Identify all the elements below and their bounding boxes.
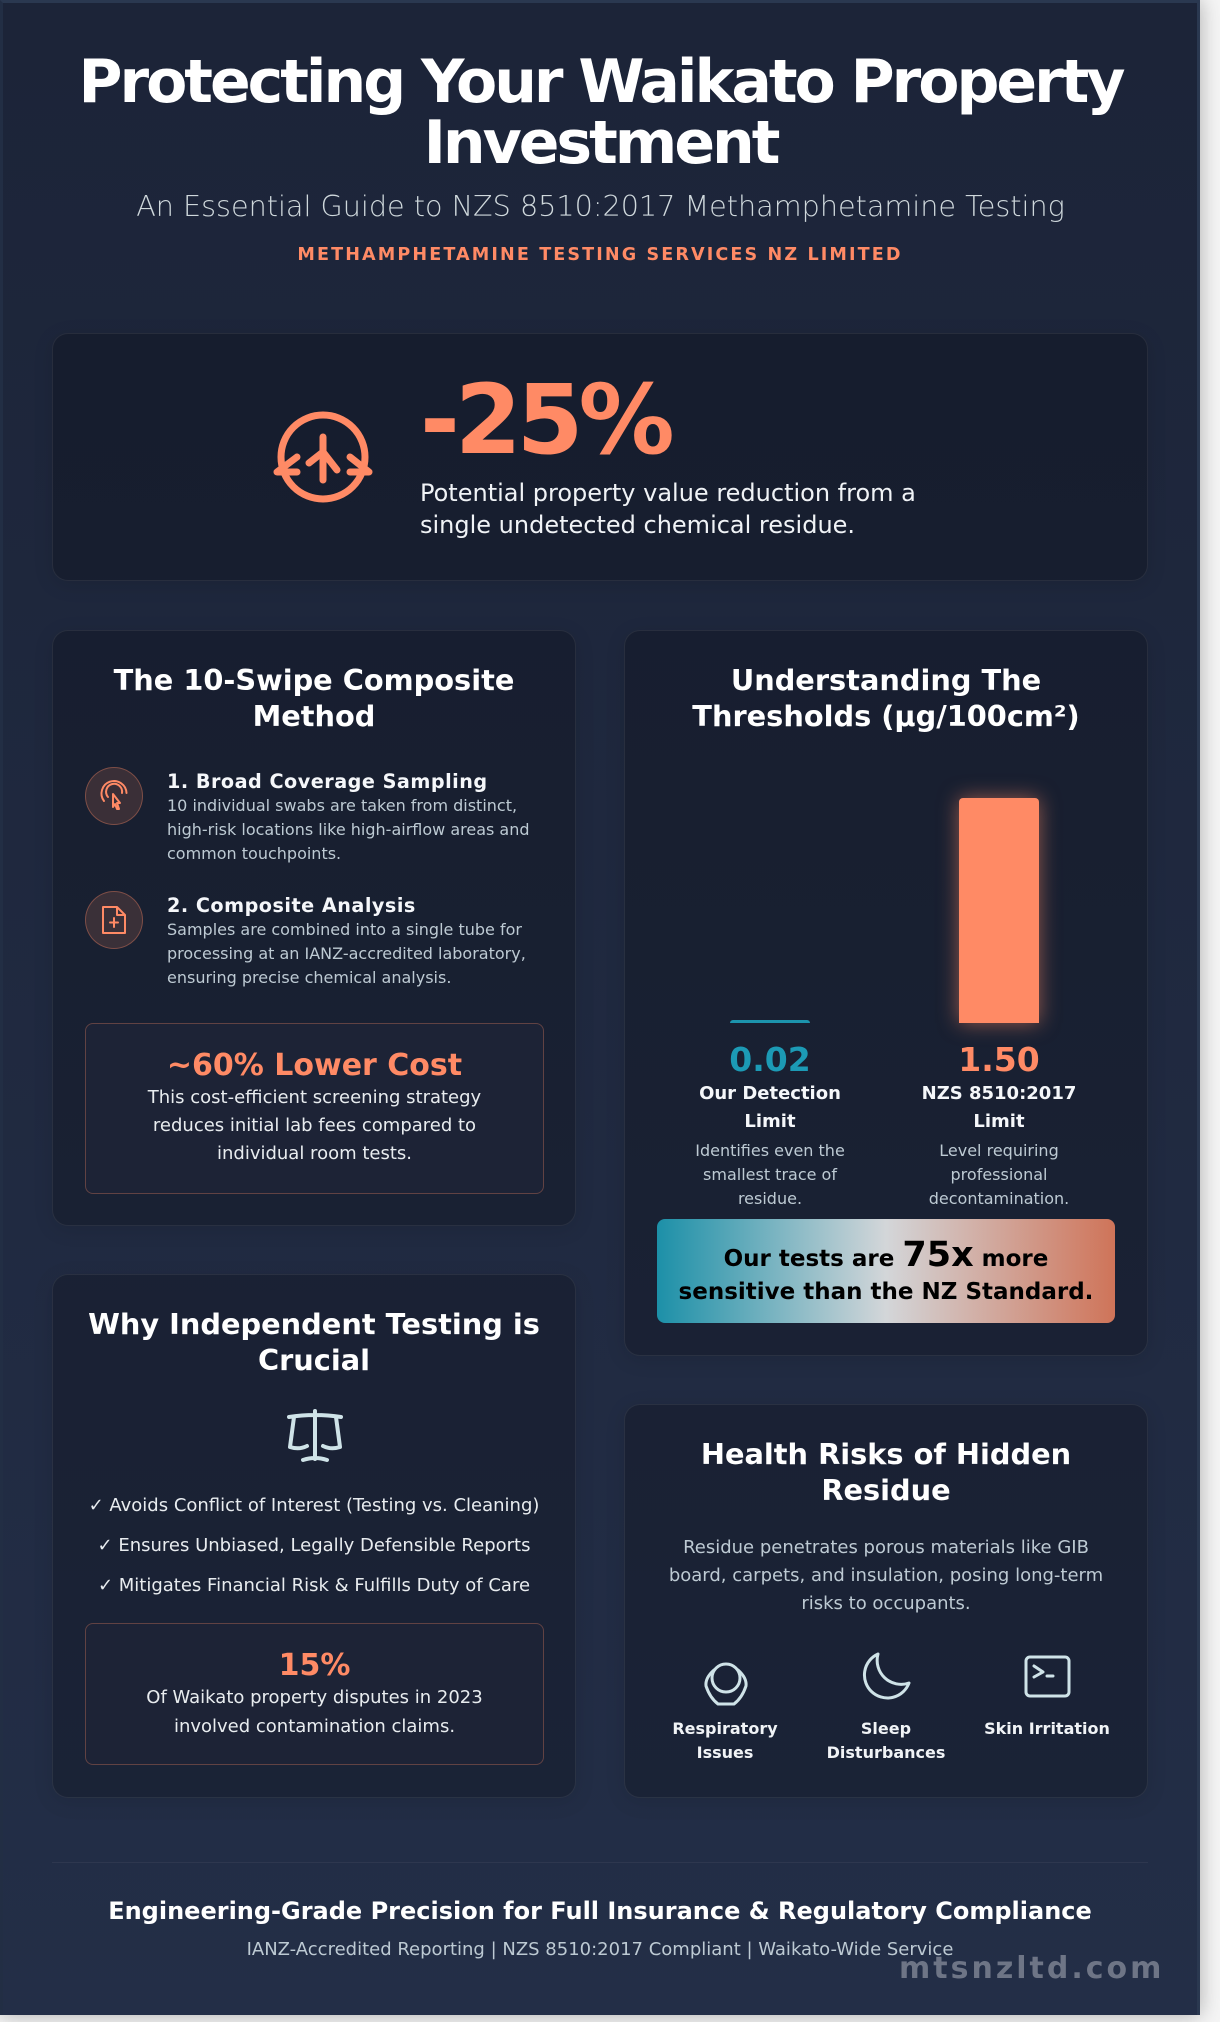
step 1 text: 10 individual swabs are taken from distinct, xyxy=(167,796,517,815)
stat description: single undetected chemical residue. xyxy=(420,511,855,539)
title xyxy=(78,47,1124,178)
header xyxy=(78,47,1124,265)
risk: respiratory xyxy=(672,1662,778,1762)
label: standard limit xyxy=(922,1083,1076,1132)
panel: value reduction hero xyxy=(52,333,1148,581)
subtitle: An Essential Guide to NZS 8510:2017 Methamphetamine Testing xyxy=(136,189,1065,223)
footer xyxy=(52,1862,1148,1963)
bar chart xyxy=(695,784,1076,1208)
label: detection limit xyxy=(699,1083,841,1132)
label: standard limit: Limit xyxy=(973,1111,1025,1132)
icon: moon xyxy=(862,1652,910,1700)
value: 0.02: 0.02 xyxy=(729,1040,811,1079)
note: standard limit: professional xyxy=(951,1165,1047,1184)
step 2 text: ensuring precise chemical analysis. xyxy=(167,968,451,987)
checklist: ✓ Mitigates Financial Risk & Fulfills Duty of Care xyxy=(98,1575,530,1596)
big stat: -25% xyxy=(420,364,670,476)
label: Disturbances xyxy=(827,1743,945,1762)
step 2 title: 2. Composite Analysis xyxy=(167,894,416,917)
checklist xyxy=(89,1495,539,1596)
label: Respiratory xyxy=(672,1719,778,1738)
callout figure: ~60% Lower Cost xyxy=(167,1048,462,1083)
panel: 10-swipe composite method xyxy=(52,630,576,1226)
checklist: ✓ Ensures Unbiased, Legally Defensible Reports xyxy=(98,1535,530,1556)
heading: Method xyxy=(253,699,375,733)
note: detection limit: smallest trace of xyxy=(703,1165,837,1184)
label xyxy=(672,1719,778,1762)
value: 1.50: 1.50 xyxy=(958,1040,1040,1079)
footer headline: Engineering-Grade Precision for Full Insurance & Regulatory Compliance xyxy=(108,1897,1092,1925)
bar: detection limit xyxy=(730,1020,810,1023)
intro text: Residue penetrates porous materials like GIB xyxy=(683,1537,1089,1558)
callout text xyxy=(148,1087,481,1164)
step 2 text: Samples are combined into a single tube for xyxy=(167,920,522,939)
intro text: risks to occupants. xyxy=(801,1593,971,1614)
note: standard limit: decontamination. xyxy=(929,1189,1069,1208)
note: standard limit xyxy=(929,1141,1069,1208)
label: Sleep xyxy=(861,1719,911,1738)
icon: terminal xyxy=(1024,1656,1070,1698)
panel: understanding the thresholds xyxy=(624,630,1148,1356)
heading: Why Independent Testing is xyxy=(88,1307,540,1341)
note: detection limit: residue. xyxy=(738,1189,802,1208)
step 2 text xyxy=(167,920,526,987)
callout text: involved contamination claims. xyxy=(174,1716,455,1737)
label: Skin Irritation xyxy=(984,1719,1110,1738)
callout text: reduces initial lab fees compared to xyxy=(153,1115,476,1136)
label xyxy=(827,1719,945,1762)
heading: Crucial xyxy=(258,1343,370,1377)
intro text: board, carpets, and insulation, posing long-term xyxy=(669,1565,1103,1586)
callout text: Of Waikato property disputes in 2023 xyxy=(146,1687,483,1708)
heading xyxy=(114,663,514,733)
label: detection limit: Our Detection xyxy=(699,1083,841,1104)
label: Issues xyxy=(697,1743,753,1762)
risk: skin xyxy=(984,1656,1110,1738)
callout text xyxy=(146,1687,483,1737)
title: Investment xyxy=(424,108,777,178)
step 2 xyxy=(85,891,526,987)
heading: Thresholds (µg/100cm²) xyxy=(692,699,1080,733)
panel: why independent testing xyxy=(52,1274,576,1798)
step 1 text: high-risk locations like high-airflow areas and xyxy=(167,820,530,839)
icon: file plus xyxy=(85,891,143,949)
callout text: individual room tests. xyxy=(217,1143,412,1164)
note: standard limit: Level requiring xyxy=(939,1141,1059,1160)
label: standard limit: NZS 8510:2017 xyxy=(922,1083,1076,1104)
icon: touch target xyxy=(85,767,143,825)
heading: The 10-Swipe Composite xyxy=(114,663,514,697)
footer details: IANZ-Accredited Reporting | NZS 8510:2017 Compliant | Waikato-Wide Service xyxy=(247,1939,953,1960)
step 2 text: processing at an IANZ-accredited laboratory, xyxy=(167,944,526,963)
callout: lower cost xyxy=(85,1023,544,1194)
icon: lungs ring xyxy=(704,1662,748,1706)
heading: Residue xyxy=(821,1473,951,1507)
label: detection limit: Limit xyxy=(744,1111,796,1132)
intro text xyxy=(669,1537,1103,1614)
note: detection limit xyxy=(695,1141,845,1208)
heading: Understanding The xyxy=(731,663,1041,697)
bar: NZ standard limit xyxy=(959,798,1039,1023)
stat description: Potential property value reduction from a xyxy=(420,479,916,507)
note: detection limit: Identifies even the xyxy=(695,1141,845,1160)
callout: 75x more sensitive: sensitive than the NZ Standard. xyxy=(679,1279,1093,1305)
icon: scales xyxy=(287,1409,343,1462)
callout: 75x more sensitive: Our tests are 75x more xyxy=(724,1235,1048,1275)
heading: Health Risks of Hidden xyxy=(701,1437,1071,1471)
callout text: This cost-efficient screening strategy xyxy=(148,1087,481,1108)
panel: health risks xyxy=(624,1404,1148,1798)
icon: circle with arrows xyxy=(274,412,372,502)
step 1 text: common touchpoints. xyxy=(167,844,341,863)
checklist: ✓ Avoids Conflict of Interest (Testing vs. Cleaning) xyxy=(89,1495,539,1516)
risk: sleep xyxy=(827,1652,945,1762)
callout: 75x more sensitive xyxy=(657,1219,1115,1323)
callout figure: 15% xyxy=(279,1648,350,1683)
step 1 xyxy=(85,767,530,863)
step 1 title: 1. Broad Coverage Sampling xyxy=(167,770,488,793)
callout: 15% xyxy=(85,1623,544,1765)
heading xyxy=(88,1307,540,1377)
heading xyxy=(701,1437,1071,1507)
heading xyxy=(692,663,1080,733)
watermark: mtsnzltd.com xyxy=(899,1951,1164,1986)
title: Protecting Your Waikato Property xyxy=(78,47,1122,117)
company name: METHAMPHETAMINE TESTING SERVICES NZ LIMITED xyxy=(297,245,903,265)
stat description xyxy=(420,479,916,539)
step 1 text xyxy=(167,796,530,863)
